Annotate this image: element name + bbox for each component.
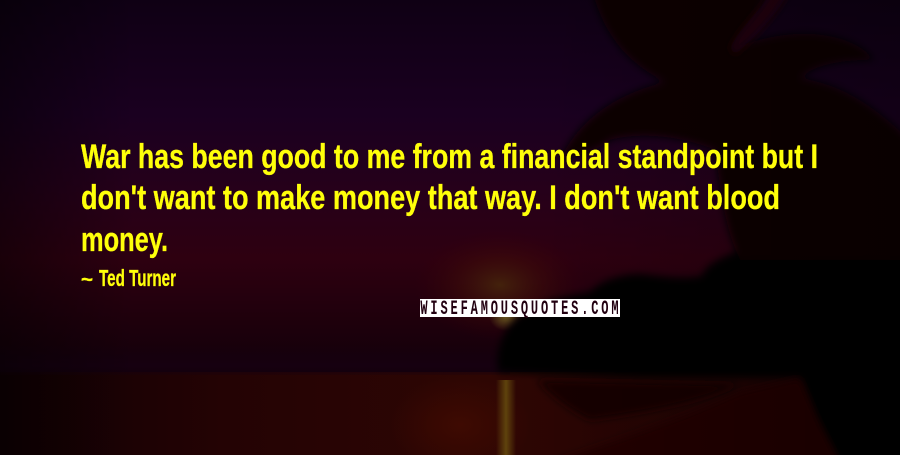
quote text: money. [81,221,168,259]
quote text [81,138,818,259]
dark horizon band [0,345,510,375]
palm trees silhouette [560,0,900,260]
warm water patch [390,375,530,455]
watermark badge: WISEFAMOUSQUOTES.COM [420,297,619,320]
sun glow [415,230,585,340]
beach in lower right [530,378,843,455]
sun reflection on water [496,380,516,455]
author attribution: ~ [81,269,93,291]
sun core [489,301,523,331]
dark shore shadow [537,380,740,420]
author attribution [81,265,176,291]
island silhouette [497,200,900,455]
palm frond highlight [730,0,790,55]
author attribution: Ted Turner [99,265,176,291]
background: sea [0,372,900,455]
